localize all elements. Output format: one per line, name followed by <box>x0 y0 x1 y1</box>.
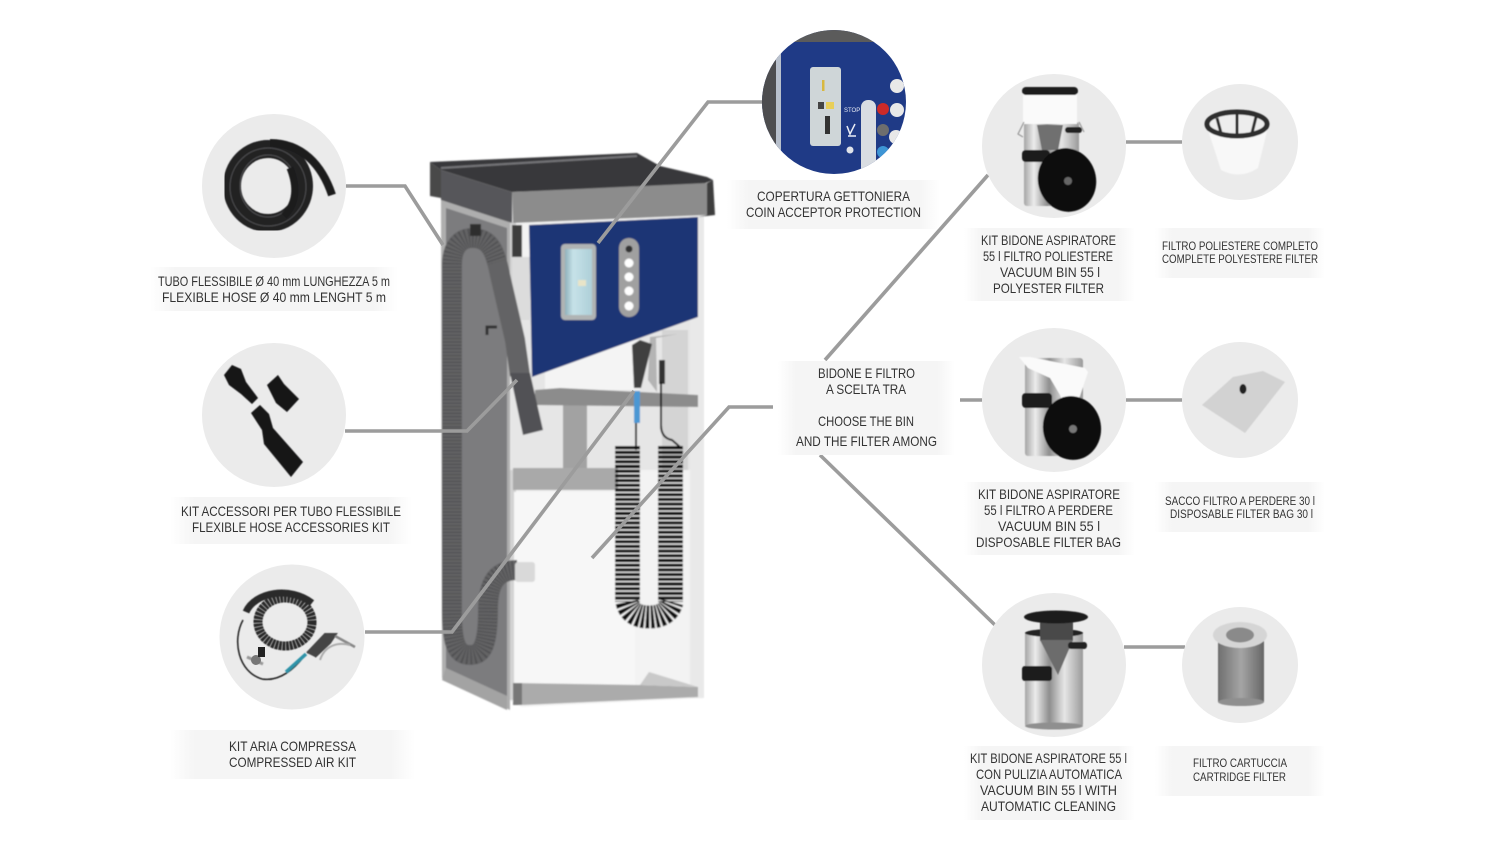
label: cartridge filter <box>1155 746 1325 796</box>
label: polyester filter bin: VACUUM BIN 55 l <box>1000 264 1100 280</box>
circle: disposable filter bag <box>1182 342 1298 458</box>
circle: compressed air kit <box>220 564 364 710</box>
label: polyester filter bin: 55 l FILTRO POLIESTERE <box>983 248 1113 264</box>
circle: hose accessories <box>202 343 346 487</box>
label: polyester filter: FILTRO POLIESTERE COMPLETO <box>1162 241 1318 253</box>
circle: disposable bag bin <box>982 328 1126 472</box>
label: automatic cleaning bin: VACUUM BIN 55 l WITH <box>980 782 1117 798</box>
label: disposable bag bin: VACUUM BIN 55 l <box>998 518 1100 534</box>
label: cartridge filter: FILTRO CARTUCCIA <box>1193 758 1287 770</box>
label: polyester filter bin <box>964 228 1135 301</box>
circle: coin acceptor close-up <box>762 30 906 176</box>
label: hose accessories: FLEXIBLE HOSE ACCESSORIES KIT <box>192 519 390 535</box>
label: automatic cleaning bin: AUTOMATIC CLEANING <box>981 798 1116 814</box>
label: disposable filter bag: SACCO FILTRO A PERDERE 30 l <box>1165 496 1315 508</box>
label: compressed air kit: COMPRESSED AIR KIT <box>229 754 356 770</box>
label: coin acceptor protection: COPERTURA GETTONIERA <box>757 188 911 204</box>
label: disposable bag bin: 55 l FILTRO A PERDERE <box>984 502 1113 518</box>
circle: flexible hose <box>202 114 346 258</box>
roof <box>430 153 715 223</box>
circle: cartridge filter <box>1182 607 1298 723</box>
leader lines <box>345 102 1185 647</box>
circle: automatic cleaning bin <box>982 593 1126 737</box>
label: hose accessories <box>170 497 412 544</box>
vacuum station machine <box>430 153 715 710</box>
label: choose bin and filter: CHOOSE THE BIN <box>818 413 914 429</box>
label: coin acceptor protection: COIN ACCEPTOR PROTECTION <box>746 204 921 220</box>
label: flexible hose: TUBO FLESSIBILE Ø 40 mm LUNGHEZZA 5 m <box>158 273 390 289</box>
label: automatic cleaning bin: KIT BIDONE ASPIRATORE 55 l <box>970 750 1127 766</box>
circle: polyester filter bin <box>982 74 1126 218</box>
air gun and coiled hose <box>627 334 680 617</box>
label: coin acceptor protection <box>727 180 940 229</box>
label: disposable filter bag <box>1155 482 1325 532</box>
coin window <box>561 244 596 320</box>
label: choose bin and filter: AND THE FILTER AMONG <box>796 433 937 449</box>
label: disposable bag bin: DISPOSABLE FILTER BAG <box>976 534 1121 550</box>
label: hose accessories: KIT ACCESSORI PER TUBO FLESSIBILE <box>181 503 401 519</box>
label: choose bin and filter: A SCELTA TRA <box>826 381 907 397</box>
label: choose bin and filter: BIDONE E FILTRO <box>818 365 915 381</box>
button strip <box>619 238 639 317</box>
label: compressed air kit <box>170 730 415 779</box>
label: cartridge filter: CARTRIDGE FILTER <box>1193 772 1286 784</box>
label: disposable filter bag: DISPOSABLE FILTER BAG 30 l <box>1170 509 1313 521</box>
label: polyester filter bin: KIT BIDONE ASPIRATORE <box>981 232 1116 248</box>
flexible hose <box>452 224 543 655</box>
label: disposable bag bin: KIT BIDONE ASPIRATORE <box>978 486 1120 502</box>
label: polyester filter <box>1155 228 1325 278</box>
circle: coin acceptor close-up: STOP <box>844 108 860 114</box>
blue control panel <box>529 217 698 377</box>
label: automatic cleaning bin: CON PULIZIA AUTOMATICA <box>976 766 1123 782</box>
cabinet body <box>441 200 704 710</box>
label: disposable bag bin <box>964 482 1135 555</box>
label: polyester filter bin: POLYESTER FILTER <box>993 280 1104 296</box>
label: flexible hose: FLEXIBLE HOSE Ø 40 mm LENGHT 5 m <box>162 289 386 305</box>
label: compressed air kit: KIT ARIA COMPRESSA <box>229 738 357 754</box>
label: automatic cleaning bin <box>964 746 1135 820</box>
label: choose bin and filter <box>778 361 955 455</box>
label: flexible hose <box>150 267 398 311</box>
circle: polyester filter <box>1182 84 1298 200</box>
label: polyester filter: COMPLETE POLYESTERE FILTER <box>1162 254 1318 266</box>
